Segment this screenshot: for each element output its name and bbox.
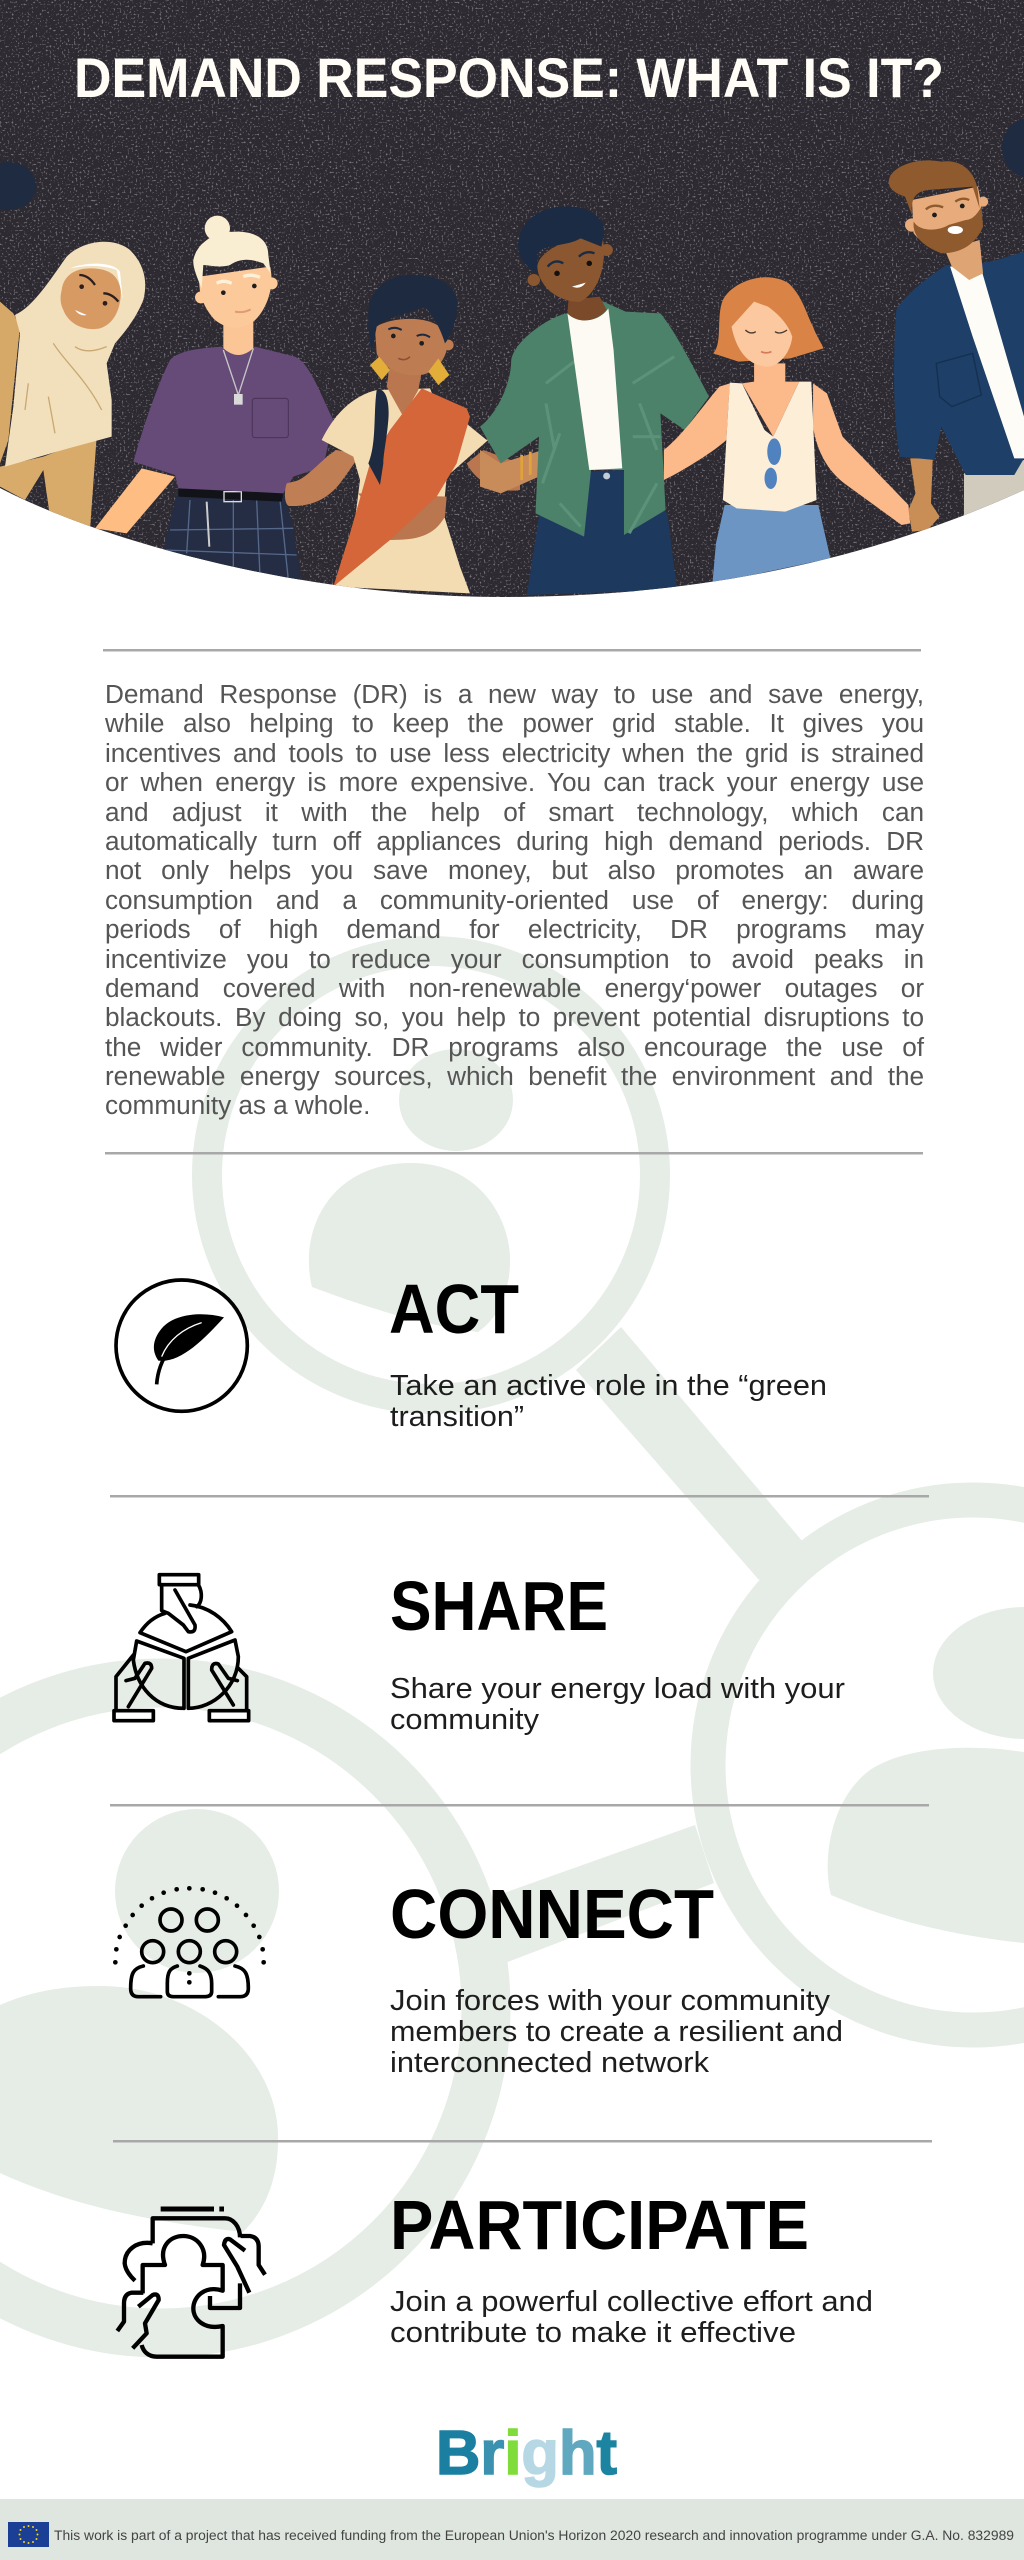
text: participate description: [390, 2286, 873, 2349]
text: connect description: members to create a resilient and: [390, 2016, 843, 2048]
text: participate description: Join a powerful collective effort and: [390, 2286, 873, 2318]
text: share description: Share your energy load with your: [390, 1673, 845, 1705]
footer band: [0, 2499, 1024, 2560]
text block: Demand Response explanation: [105, 679, 924, 1120]
icon: hands joining puzzle pieces: [117, 2209, 265, 2357]
text block: Demand Response explanation: community as a whole.: [105, 1090, 370, 1120]
text block: Demand Response explanation: incentivize you to reduce your consumption to avoid peaks in: [105, 944, 924, 974]
text block: Demand Response explanation: or when energy is more expensive. You can track your energy use: [105, 767, 924, 797]
text: connect description: Join forces with your community: [390, 1985, 831, 2017]
text block: Demand Response explanation: Demand Response (DR) is a new way to use and save energy,: [105, 679, 924, 709]
text: share description: [390, 1673, 845, 1736]
text block: Demand Response explanation: periods of high demand for electricity, DR programs may: [105, 914, 924, 944]
text block: Demand Response explanation: automatically turn off appliances during high demand periods. DR: [105, 826, 924, 856]
person: woman in hijab: [0, 242, 145, 530]
icon: leaf in circle: [116, 1280, 247, 1411]
text block: Demand Response explanation: the wider community. DR programs also encourage the use of: [105, 1032, 924, 1062]
text block: Demand Response explanation: incentives and tools to use less electricity when the grid is strained: [105, 738, 924, 768]
section: participate: [117, 2186, 873, 2357]
text block: Demand Response explanation: while also helping to keep the power grid stable. It gives you: [105, 708, 924, 738]
text: connect description: [390, 1985, 843, 2079]
heading: participate: PARTICIPATE: [390, 2186, 809, 2264]
text: act description: transition”: [390, 1401, 524, 1433]
icon: group of people under dotted arc: [113, 1886, 266, 1997]
text block: Demand Response explanation: not only helps you save money, but also promotes an aware: [105, 855, 924, 885]
intro top rule and bottom rule: [103, 649, 923, 1154]
text block: Demand Response explanation: and adjust it with the help of smart technology, which can: [105, 797, 924, 827]
icon: EU flag: [8, 2522, 49, 2547]
icon: hands sharing a pie: [114, 1575, 249, 1721]
background: ghost community network icon: [0, 951, 1024, 2333]
text block: Demand Response explanation: consumption and a community-oriented use of energy: during: [105, 885, 924, 915]
person: blond man in purple shirt: [95, 216, 333, 583]
text: act description: [390, 1370, 827, 1433]
text block: Demand Response explanation: demand covered with non-renewable energy‘power outages or: [105, 973, 924, 1003]
heading: act: ACT: [389, 1270, 519, 1348]
text: share description: community: [390, 1704, 540, 1736]
heading: connect: CONNECT: [390, 1875, 714, 1953]
section: share: [114, 1567, 845, 1736]
text block: Demand Response explanation: blackouts. By doing so, you help to prevent potential disruptions to: [105, 1002, 924, 1032]
heading: share: SHARE: [390, 1567, 608, 1645]
person: woman in orange sari: [285, 275, 520, 593]
person: man in green shirt: [480, 206, 709, 595]
text: participate description: contribute to make it effective: [390, 2317, 796, 2349]
divider rules between sections: [110, 1495, 932, 2142]
title: DEMAND RESPONSE: WHAT IS IT?: [74, 46, 944, 109]
logo: Bright: Bright: [436, 2419, 617, 2488]
person: woman with red hair: [664, 277, 910, 583]
section: connect: [113, 1875, 843, 2079]
text: act description: Take an active role in the “green: [390, 1370, 827, 1402]
section: act: [116, 1270, 827, 1433]
text: connect description: interconnected network: [390, 2047, 710, 2079]
footer funding text: This work is part of a project that has received funding from the European Union's Horizon 2020 research and innovation programme under G.A. No. 832989: [54, 2528, 1014, 2543]
person: bearded man in navy jacket: [889, 160, 1024, 532]
text block: Demand Response explanation: renewable energy sources, which benefit the environment and the: [105, 1061, 924, 1091]
hero panel: people holding hands on dark textured background: [0, 0, 1024, 620]
